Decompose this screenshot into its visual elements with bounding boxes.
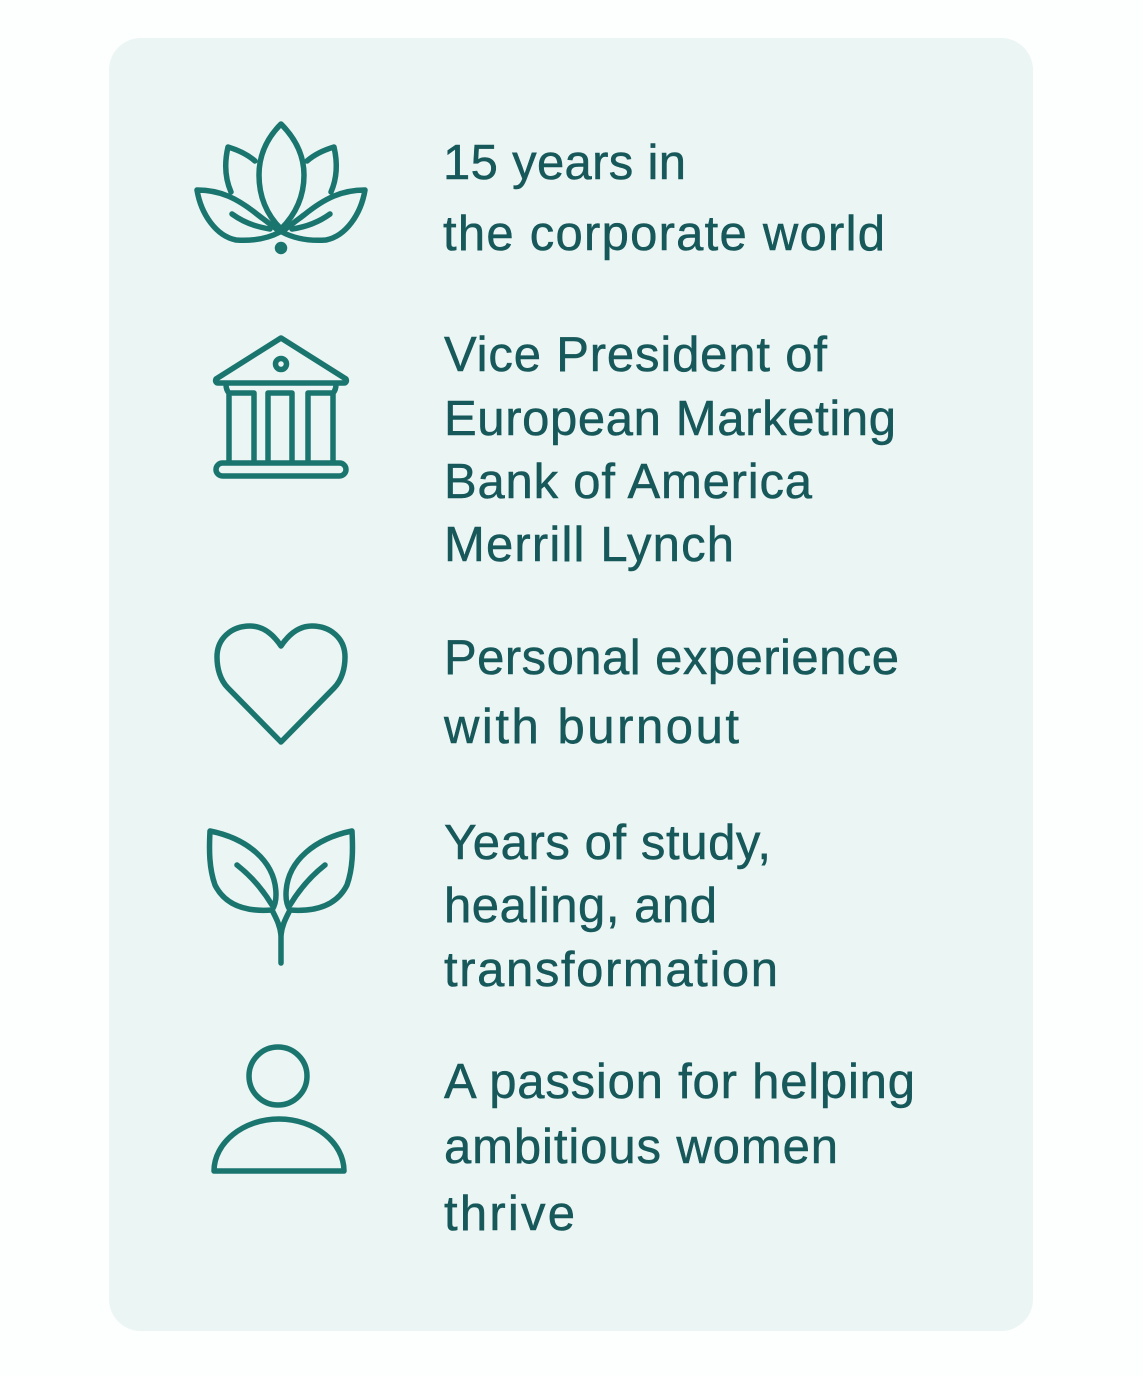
- text: burnout: with burnout: [443, 700, 739, 754]
- text: Vice President: Merrill Lynch: [444, 518, 734, 572]
- icon: bank building: [216, 338, 346, 476]
- text: Vice President: European Marketing: [444, 392, 896, 446]
- text: passion: ambitious women: [444, 1120, 838, 1174]
- text: study: transformation: [444, 943, 778, 997]
- icon: person: [214, 1047, 344, 1171]
- text: Vice President: Bank of America: [444, 455, 813, 509]
- text: study: Years of study,: [444, 816, 771, 870]
- text: study: [444, 816, 778, 997]
- text: passion: [444, 1055, 915, 1241]
- text: 15 years: the corporate world: [443, 207, 885, 261]
- text: burnout: [443, 631, 899, 754]
- icon: sprout: [210, 831, 352, 963]
- icon: heart: [217, 626, 345, 742]
- text: burnout: Personal experience: [444, 631, 899, 685]
- panel: background card: [109, 38, 1033, 1331]
- text: passion: thrive: [444, 1187, 575, 1241]
- icon: lotus: [197, 124, 365, 252]
- text: Vice President: [444, 328, 896, 572]
- text: 15 years: 15 years in: [443, 136, 686, 190]
- text: study: healing, and: [444, 879, 717, 933]
- text: passion: A passion for helping: [444, 1055, 915, 1109]
- text: 15 years: [443, 136, 885, 261]
- text: Vice President: Vice President of: [444, 328, 827, 382]
